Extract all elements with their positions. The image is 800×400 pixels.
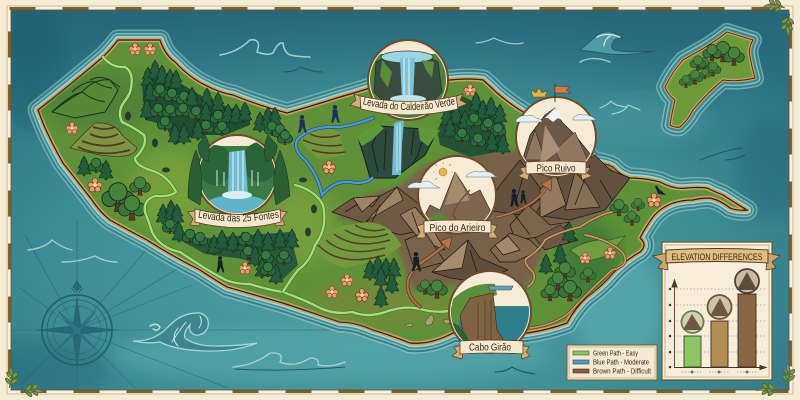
north wave 1 bbox=[220, 40, 310, 57]
hills west bbox=[52, 78, 120, 118]
medallion: Cabo Girão bbox=[449, 271, 531, 359]
small north-east island bbox=[665, 32, 755, 127]
forest: south bbox=[180, 229, 299, 284]
medallion: Pico Ruivo bbox=[516, 84, 598, 180]
forest: east bbox=[539, 198, 645, 301]
forest: centre south bbox=[363, 256, 447, 307]
compass rose bbox=[11, 220, 330, 388]
coast foam bbox=[38, 40, 747, 343]
elevation panel bbox=[653, 242, 780, 380]
terrace west bbox=[70, 123, 137, 156]
mountains range bbox=[332, 155, 630, 282]
trail: brown path difficult bbox=[408, 178, 625, 328]
terraced hills bbox=[52, 78, 402, 268]
terrace south bbox=[316, 222, 402, 268]
big south wave bbox=[133, 313, 257, 351]
forests bbox=[77, 60, 645, 307]
terrace central bbox=[300, 129, 345, 160]
forest: north bbox=[140, 60, 252, 145]
medallion: Pico Ruivo: Pico Ruivo bbox=[536, 164, 576, 174]
brown mountain ground bbox=[335, 150, 625, 290]
forest: west oaks bbox=[77, 156, 186, 242]
forest: north small bbox=[253, 107, 293, 145]
waves bbox=[28, 32, 745, 374]
panel title banner: ELEVATION DIFFERENCES bbox=[672, 252, 762, 262]
medallion: Pico do Arieiro bbox=[408, 156, 498, 238]
trail: blue path moderate bbox=[296, 118, 373, 195]
legend bbox=[567, 345, 657, 380]
legend: green: Green Path - Easy bbox=[593, 348, 638, 358]
forest: centre north bbox=[437, 92, 510, 157]
trail: green path easy bbox=[103, 57, 449, 315]
legend: blue: Blue Path - Moderate bbox=[593, 358, 649, 366]
canyon and waterfall bbox=[356, 120, 440, 178]
south wave 2 bbox=[233, 353, 345, 367]
bar: tan bbox=[708, 295, 732, 367]
chart axes bbox=[669, 280, 766, 370]
north east wave bbox=[580, 32, 655, 114]
land fill bbox=[38, 40, 747, 343]
main island bbox=[38, 40, 747, 343]
flowers bbox=[66, 43, 661, 327]
medallion: Levada do Caldeirão Verde: Levada do Caldeirão Verde bbox=[363, 97, 455, 110]
medallion: Levada do Caldeirão Verde bbox=[349, 39, 468, 121]
medallion: Levada das 25 Fontes: Levada das 25 Fontes bbox=[198, 210, 279, 222]
hikers and footprints bbox=[125, 105, 666, 272]
medallion: Cabo Girão: Cabo Girão bbox=[469, 342, 511, 354]
bar: brown bbox=[735, 269, 759, 367]
medallion: Levada das 25 Fontes bbox=[188, 134, 290, 228]
legend: brown: Brown Path - Difficult bbox=[593, 366, 651, 376]
medallion: Pico do Arieiro: Pico do Arieiro bbox=[430, 223, 486, 234]
bar: green bbox=[682, 311, 704, 367]
